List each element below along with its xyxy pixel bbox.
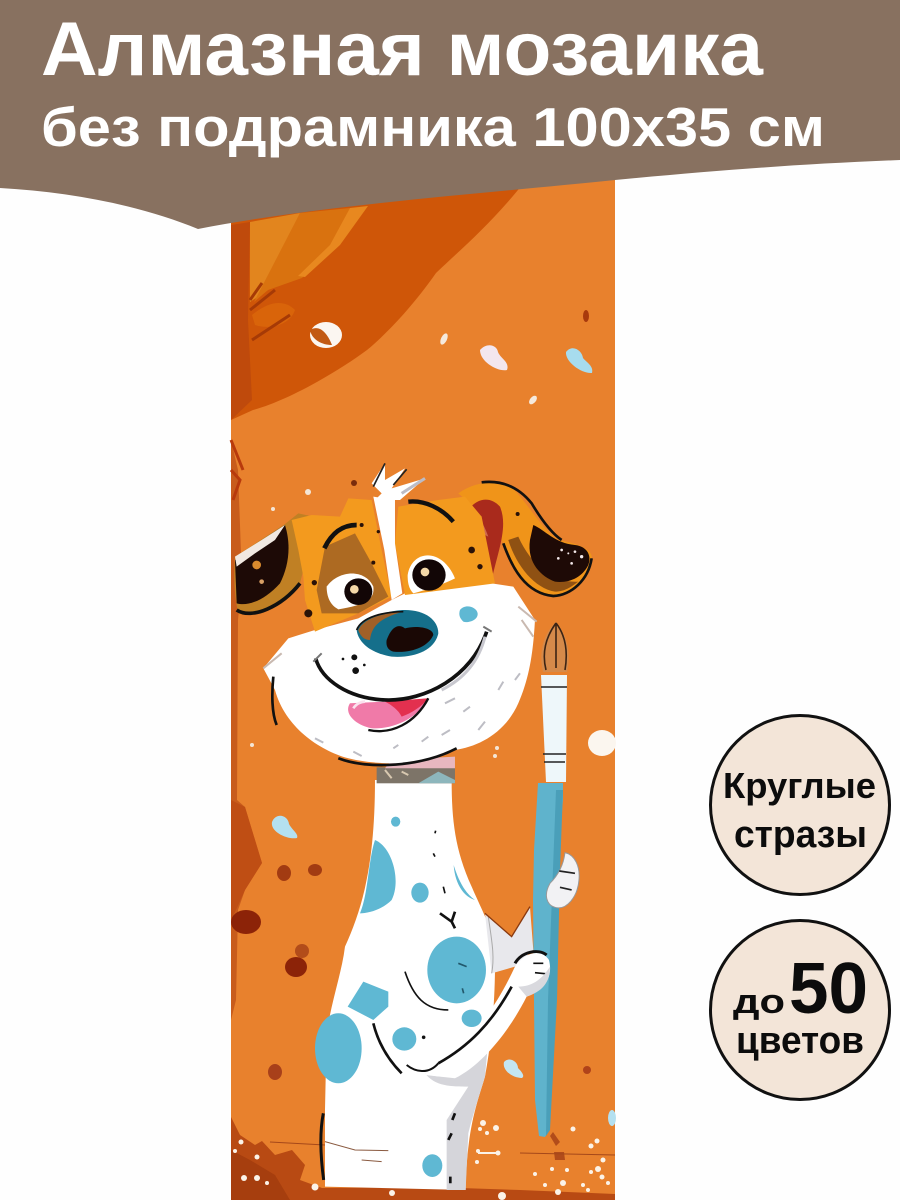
left eye xyxy=(327,574,373,609)
tongue and mouth xyxy=(348,698,428,728)
badge: up to 50 colours: цветов xyxy=(736,1020,864,1062)
paint splashes on background xyxy=(231,310,616,1126)
badge: round rhinestones xyxy=(710,716,890,894)
badge: up to 50 colours xyxy=(710,920,890,1100)
left ear xyxy=(234,513,325,614)
title line one: Алмазная мозаика xyxy=(41,7,764,92)
smile xyxy=(316,632,487,700)
dog head xyxy=(234,463,592,765)
nose xyxy=(357,610,438,657)
right ear xyxy=(458,482,592,597)
brush bristles xyxy=(541,622,569,672)
rust ground at the bottom xyxy=(231,1117,615,1200)
muzzle dots xyxy=(342,654,366,674)
face spots xyxy=(304,512,520,617)
fur marks xyxy=(373,831,467,1183)
dog collar xyxy=(377,757,455,783)
paintbrush xyxy=(533,622,569,1137)
dark rust brush area top left xyxy=(231,185,522,420)
badge: up to 50 colours: 50 xyxy=(789,949,868,1029)
title line two: без подрамника 100х35 см xyxy=(41,96,825,158)
orange face mask xyxy=(292,498,392,632)
dog illustration xyxy=(234,463,592,1190)
fur dashes xyxy=(315,673,520,756)
eyebrows xyxy=(324,525,357,548)
dog body and neck xyxy=(315,780,533,1190)
badge: round rhinestones: стразы xyxy=(734,814,867,856)
badge: up to 50 colours: до xyxy=(733,983,785,1021)
white muzzle and face xyxy=(263,583,535,763)
banner: title ribbon xyxy=(0,0,900,229)
brush handle xyxy=(533,783,563,1137)
right eye xyxy=(408,555,455,593)
blue cheek spot xyxy=(459,606,478,622)
badge: round rhinestones: Круглые xyxy=(723,765,876,806)
paws holding the brush xyxy=(407,853,579,1078)
white blaze and tuft xyxy=(373,497,402,600)
panel: orange painting background xyxy=(231,170,615,1200)
brush ferrule xyxy=(541,675,567,782)
blue paint spots xyxy=(315,817,486,1177)
